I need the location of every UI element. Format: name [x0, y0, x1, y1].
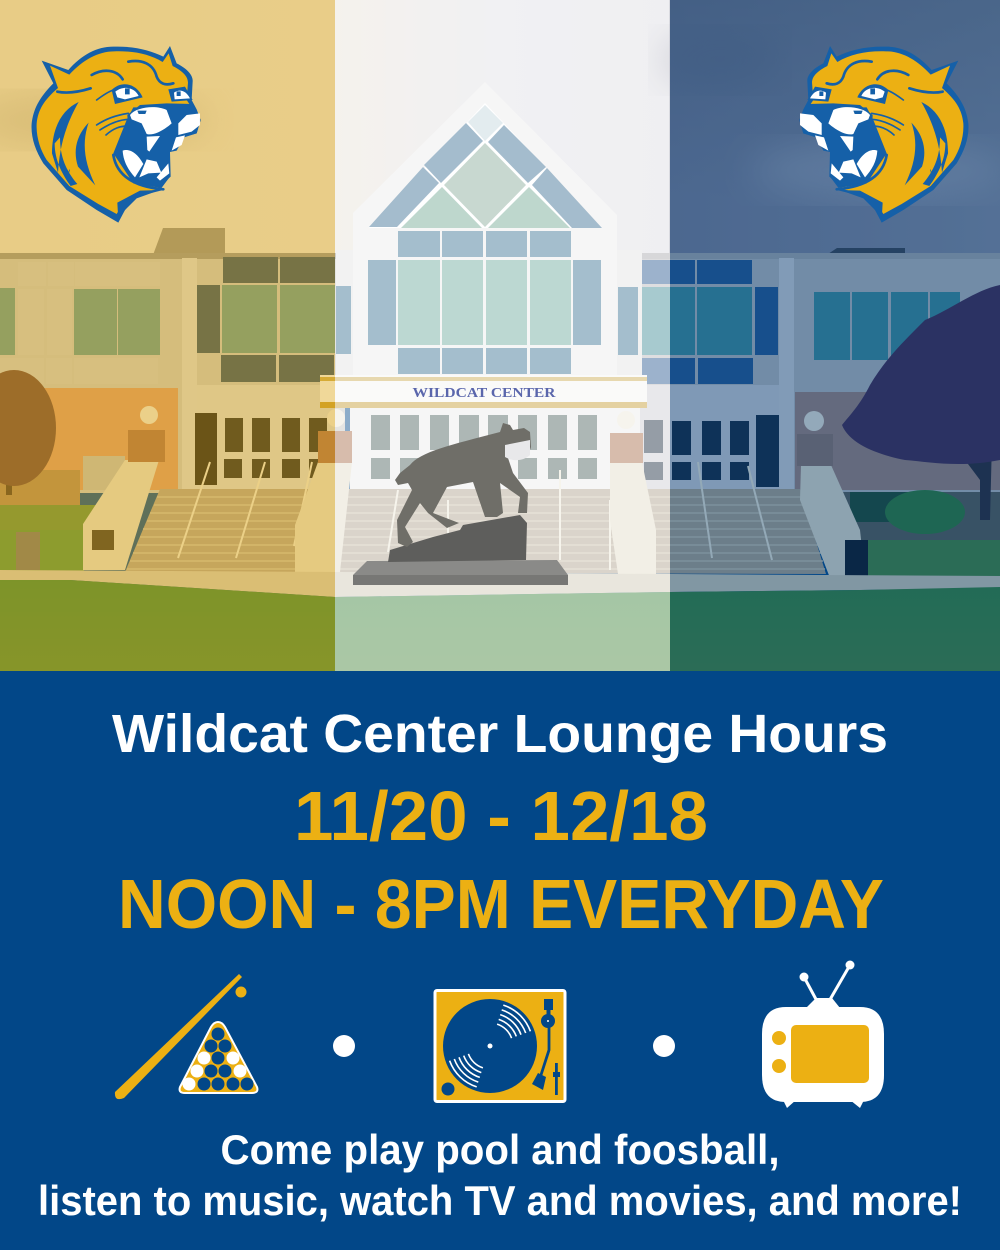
sign and bin [92, 530, 868, 578]
lawn [0, 580, 1000, 671]
right wing [640, 248, 1000, 493]
dates: 11/20 - 12/18 [294, 777, 708, 855]
navy tint band [670, 0, 1000, 671]
tree right [842, 285, 1000, 520]
central gable [336, 82, 642, 380]
brick pillars with lamps [128, 406, 833, 466]
fences and planting [0, 456, 1000, 578]
tree left [0, 370, 56, 495]
separator dot [333, 1035, 355, 1057]
photo: Wildcat Center building with tinted bands [0, 0, 1000, 671]
walkway [0, 570, 1000, 597]
left wing [0, 228, 345, 493]
separator dot [653, 1035, 675, 1057]
icon: turntable [435, 990, 565, 1102]
text block: activities: listen to music, watch TV and movies, and more! [38, 1177, 962, 1224]
sign: building name: WILDCAT CENTER [412, 386, 556, 401]
hours: NOON - 8PM EVERYDAY [118, 865, 884, 943]
logo: wildcat right [799, 46, 968, 223]
entrance canopy [320, 375, 647, 408]
yellow tint band [0, 0, 335, 671]
entrance doors [350, 408, 640, 490]
white tint band [335, 0, 670, 671]
stair side walls [83, 460, 865, 578]
statue [353, 423, 568, 585]
text block: activities [38, 1126, 962, 1224]
text block: activities: Come play pool and foosball, [220, 1126, 780, 1173]
icon: television [762, 960, 884, 1108]
steps [125, 462, 826, 574]
sky [0, 0, 1000, 300]
panel: navy information area [0, 671, 1000, 1250]
logo: wildcat left [32, 46, 201, 223]
icon: pool cue and rack [115, 974, 257, 1099]
heading: Wildcat Center Lounge Hours [112, 704, 888, 764]
